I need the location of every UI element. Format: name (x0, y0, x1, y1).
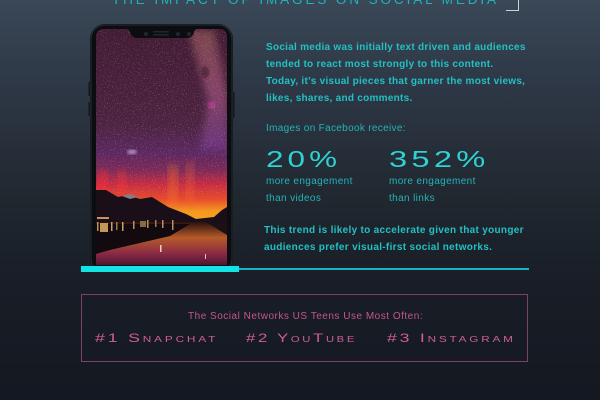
title bracket (506, 0, 519, 11)
intro paragraph: likes, shares, and comments. (266, 93, 413, 104)
closing paragraph (264, 225, 524, 253)
notch sensors (144, 31, 191, 36)
panel heading: The Social Networks US Teens Use Most Often: (188, 311, 423, 322)
intro paragraph (266, 42, 526, 104)
lake (96, 222, 227, 267)
intro paragraph: Today, it’s visual pieces that garner the most views, (266, 76, 525, 87)
panel: top networks (81, 294, 528, 362)
closing paragraph: This trend is likely to accelerate given that younger (264, 225, 524, 236)
stat: 352% (389, 146, 490, 204)
stat: 352%: 352% (389, 146, 490, 172)
stat: 352%: than links (389, 193, 435, 204)
rank 2: #2 YouTube (246, 331, 357, 345)
phone mockup with night sky photo (88, 24, 234, 266)
stat: 20%: than videos (266, 193, 321, 204)
stat: 20% (266, 146, 353, 204)
photo (96, 29, 228, 267)
facebook lead-in: Images on Facebook receive: (266, 123, 406, 134)
town lights (97, 217, 206, 259)
closing paragraph: audiences prefer visual-first social networks. (264, 242, 492, 253)
phone body (88, 24, 234, 274)
rank 3: #3 Instagram (387, 331, 516, 345)
progress divider (81, 266, 529, 272)
mountains (96, 190, 227, 224)
stat: 20%: 20% (266, 146, 341, 172)
stat: 352%: more engagement (389, 176, 476, 187)
stat: 20%: more engagement (266, 176, 353, 187)
intro paragraph: Social media was initially text driven and audiences (266, 42, 526, 53)
rank 1: #1 Snapchat (95, 331, 218, 345)
intro paragraph: tended to react most strongly to this content. (266, 59, 493, 70)
